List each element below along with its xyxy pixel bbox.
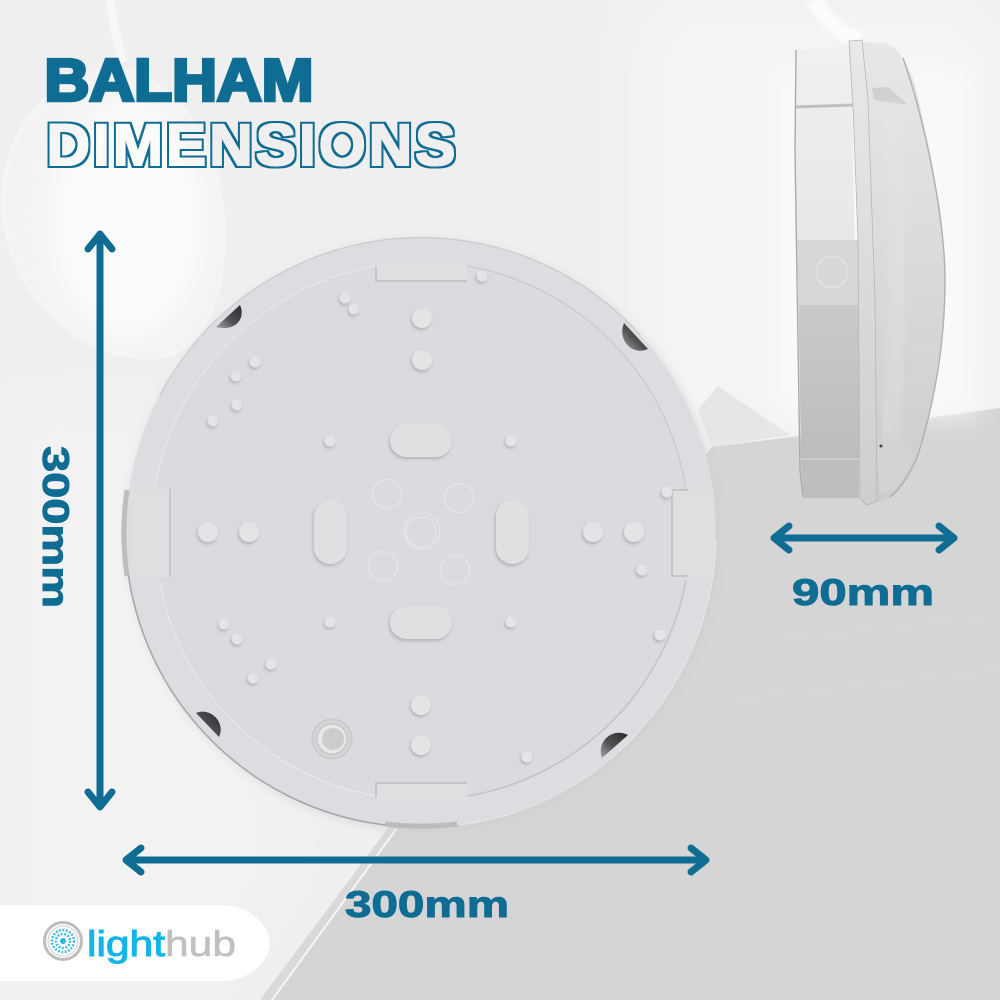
plate: inner recess xyxy=(153,264,689,800)
side view: rear housing xyxy=(795,46,860,498)
round back plate xyxy=(124,237,720,832)
plate: outer ring xyxy=(126,237,716,827)
arrow: horizontal 300mm xyxy=(126,848,706,872)
plate: pegs xyxy=(198,270,672,762)
title: DIMENSIONS: DIMENSIONS xyxy=(46,113,459,178)
arrow: depth 90mm xyxy=(774,526,954,550)
plate: cable gland xyxy=(312,719,352,759)
plate: tabs xyxy=(130,262,714,803)
label: 90mm: 90mm xyxy=(792,572,934,613)
side view: flange ring xyxy=(849,40,877,505)
plate: keyhole cut-outs xyxy=(196,305,648,758)
plate: slots xyxy=(314,424,529,639)
side view of luminaire xyxy=(795,40,945,505)
label: vertical 300mm: 300mm xyxy=(35,446,76,608)
side view: front dome xyxy=(862,42,945,503)
arrow: vertical 300mm xyxy=(88,234,112,807)
title: BALHAM: BALHAM xyxy=(44,47,314,113)
logo icon xyxy=(44,922,82,960)
side view glow xyxy=(775,0,975,415)
label: horizontal 300mm: 300mm xyxy=(345,884,509,925)
background floor shape xyxy=(260,386,1000,1000)
background luminaire, blurred xyxy=(3,0,224,358)
plate: central knockouts xyxy=(368,480,474,584)
logo wordmark: light hub xyxy=(87,923,236,964)
logo badge xyxy=(0,905,270,981)
